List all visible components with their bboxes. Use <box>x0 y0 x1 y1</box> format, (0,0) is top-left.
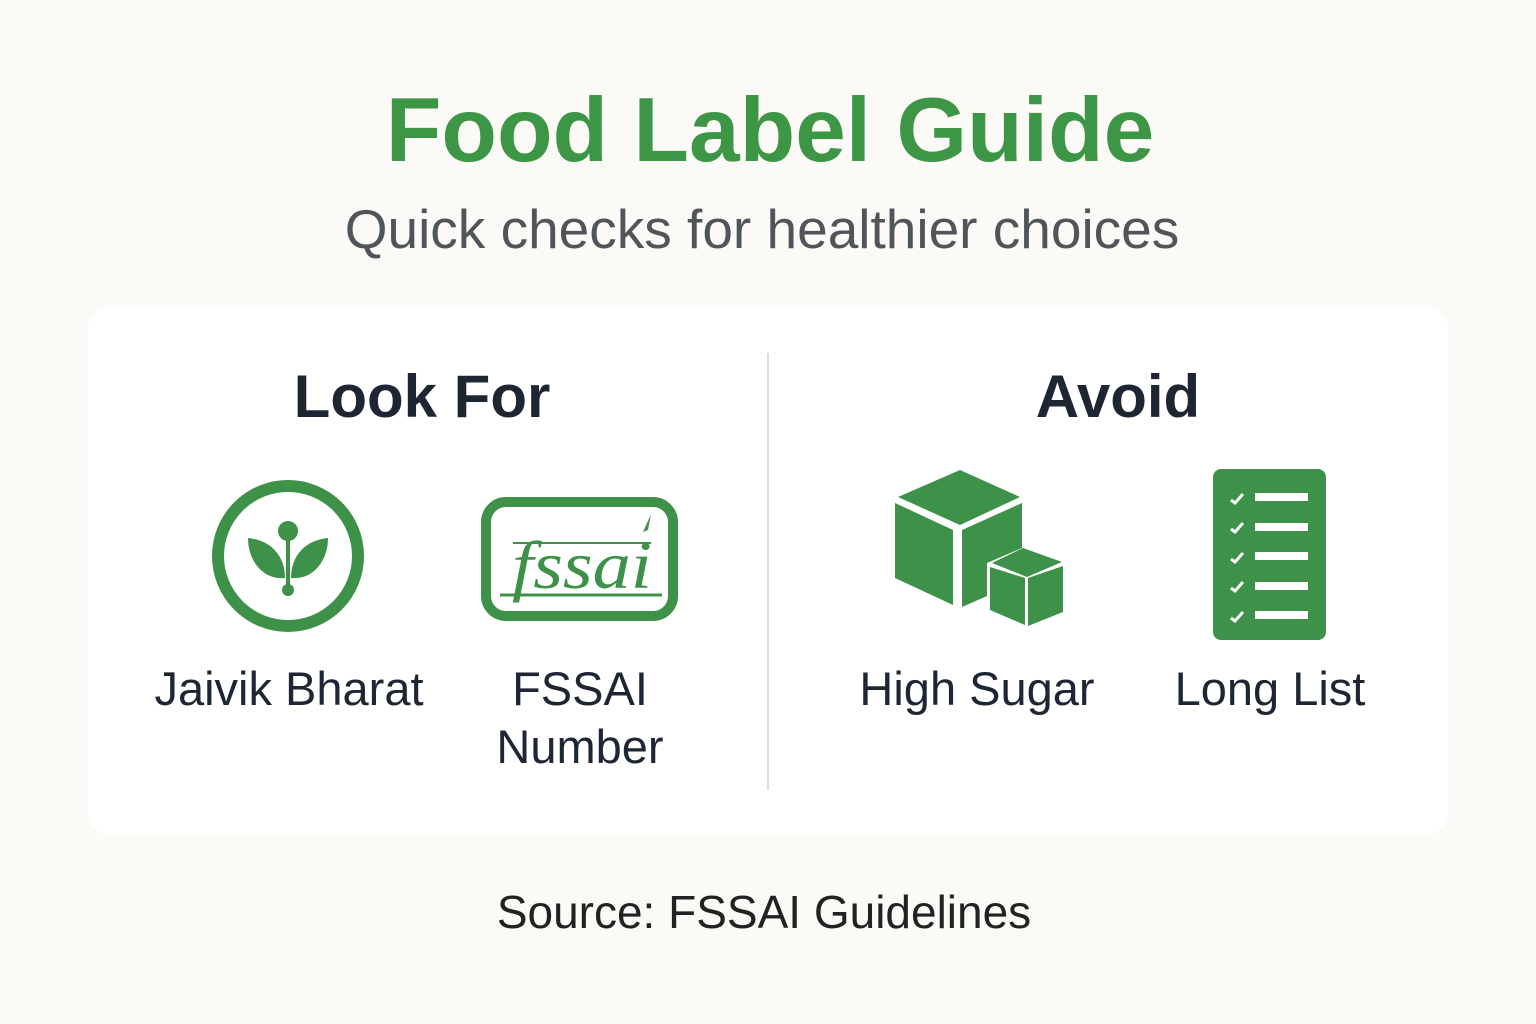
icon: ingredient list <box>1213 469 1326 640</box>
icon: FSSAI logo <box>486 502 673 616</box>
icon: FSSAI logo: fssai <box>512 527 652 603</box>
title: Food Label Guide <box>386 80 1154 181</box>
heading: Avoid: Avoid <box>1036 363 1200 430</box>
icon: Jaivik Bharat <box>218 486 358 626</box>
label: FSSAI Number: Number <box>496 720 664 773</box>
label: Long List: Long List <box>1175 662 1365 715</box>
icon: sugar cubes <box>895 470 1063 626</box>
subtitle: Quick checks for healthier choices <box>345 198 1179 260</box>
label: Jaivik Bharat: Jaivik Bharat <box>154 662 424 715</box>
source: Source: FSSAI Guidelines <box>497 886 1031 938</box>
heading: Look For: Look For <box>294 363 550 430</box>
panel: main card <box>88 307 1448 835</box>
label: High Sugar: High Sugar <box>859 662 1095 715</box>
label: FSSAI Number: FSSAI <box>512 662 648 715</box>
